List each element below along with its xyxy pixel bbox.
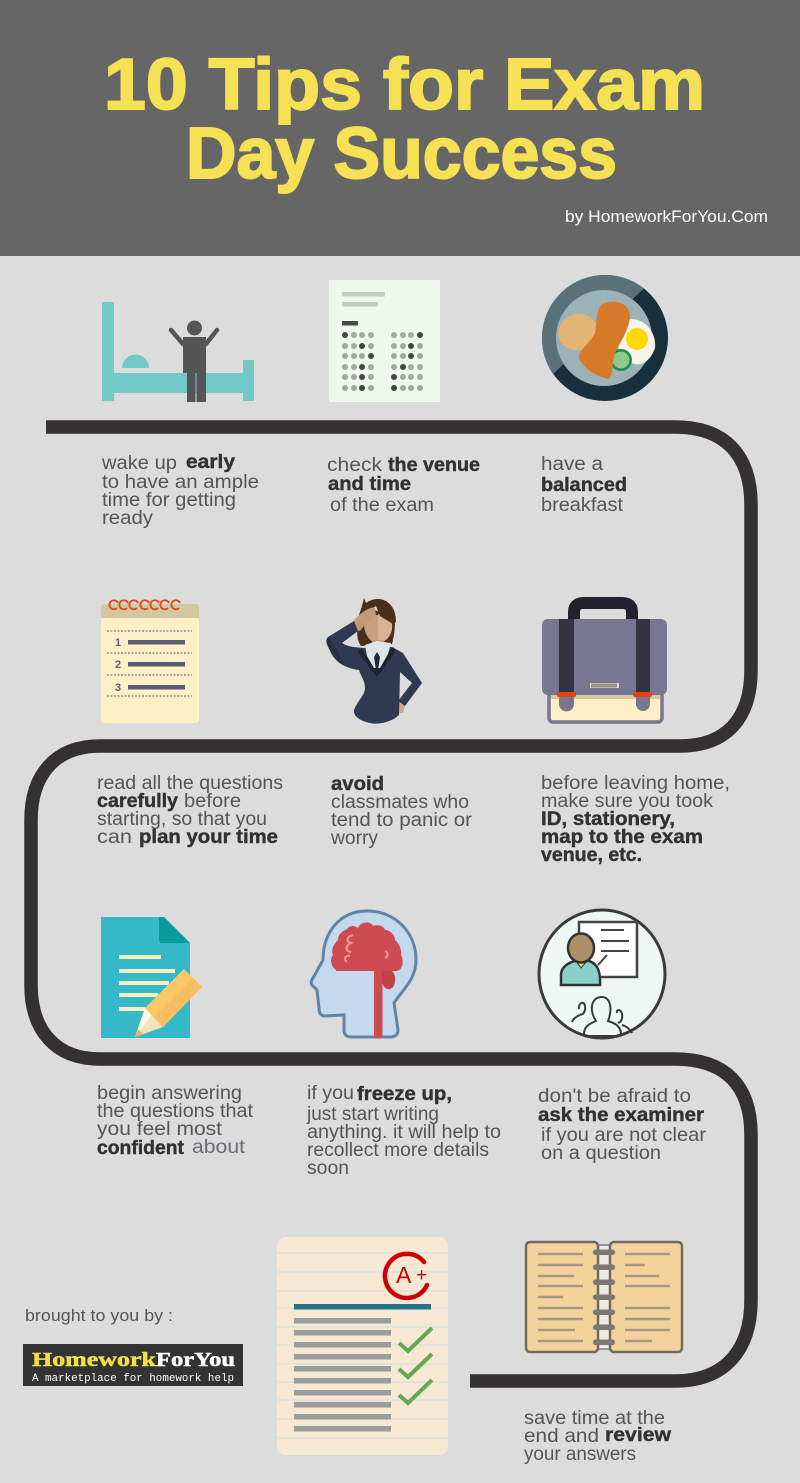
tip 2 text: the venue	[388, 455, 480, 476]
tip 7 text: confident	[97, 1138, 185, 1159]
title: Day Success	[186, 114, 617, 194]
tip 1 text: to have an ample	[102, 472, 259, 493]
tip 3 text: breakfast	[541, 495, 624, 516]
tip 10 text: your answers	[524, 1444, 636, 1465]
tip 9 text: if you are not clear	[541, 1125, 707, 1146]
icon: breakfast plate	[542, 275, 668, 401]
tip 1 text	[101, 452, 259, 529]
tip 10 text: end and	[524, 1426, 599, 1447]
tip 5 text	[330, 774, 473, 849]
tip 1 text: ready	[102, 508, 154, 529]
tip 8 text: if you	[307, 1083, 354, 1104]
tip 5 text: avoid	[331, 774, 384, 795]
tip 6 text	[541, 773, 730, 866]
tip 10 text: review	[605, 1425, 671, 1446]
tip 8 text: soon	[307, 1158, 349, 1179]
brought to you by label: brought to you by :	[25, 1306, 173, 1325]
tip 4 text	[97, 773, 283, 848]
icon: exam answer sheet	[329, 280, 440, 402]
icon: numbered notepad	[101, 600, 199, 723]
logo: HomeworkForYou: Homework	[32, 1349, 157, 1371]
tip 6 text: make sure you took	[541, 791, 714, 812]
tip 8 text: anything. it will help to	[307, 1122, 501, 1143]
tip 2 text	[327, 455, 480, 516]
title: 10 Tips for Exam	[104, 45, 705, 125]
tip 7 text: about	[192, 1137, 246, 1158]
tip 3 text	[541, 454, 627, 516]
tip 4 text: before	[184, 791, 241, 812]
winding timeline path	[31, 427, 751, 1381]
icon: bed and waking person	[102, 302, 254, 402]
tip 6 text: venue, etc.	[541, 845, 642, 866]
tip 2 text: check	[327, 455, 383, 476]
tip 4 text: carefully	[97, 791, 178, 812]
tip 8 text: recollect more details	[307, 1140, 489, 1161]
tip 3 text: have a	[541, 454, 603, 475]
tip 7 text	[97, 1083, 254, 1159]
tip 7 text: you feel most	[97, 1119, 223, 1140]
tip 9 text: on a question	[541, 1143, 661, 1164]
icon: numbered notepad: 3	[115, 682, 121, 694]
tip 1 text: early	[186, 452, 235, 473]
icon: graded exam paper: A	[396, 1262, 412, 1288]
tip 6 text: before leaving home,	[541, 773, 730, 794]
tip 8 text	[306, 1083, 501, 1179]
tip 4 text: read all the questions	[97, 773, 283, 794]
tip 2 text: and time	[328, 474, 411, 495]
logo: HomeworkForYou: A marketplace for homework help	[32, 1373, 234, 1385]
icon: numbered notepad: 2	[115, 659, 121, 671]
tip 4 text: can	[97, 827, 132, 848]
tip 9 text	[538, 1086, 707, 1164]
tip 8 text: freeze up,	[357, 1084, 452, 1105]
logo: HomeworkForYou	[23, 1344, 243, 1386]
tip 10 text	[524, 1408, 671, 1465]
icon: document and pencil	[101, 917, 202, 1038]
tip 1 text: time for getting	[102, 490, 236, 511]
tip 4 text: plan your time	[139, 827, 278, 848]
tip 8 text: just start writing	[306, 1104, 439, 1125]
icon: graded exam paper: +	[416, 1265, 427, 1286]
tip 9 text: ask the examiner	[538, 1105, 705, 1126]
tip 6 text: ID, stationery,	[541, 809, 675, 830]
tip 4 text: starting, so that you	[97, 809, 267, 830]
logo: HomeworkForYou: ForYou	[156, 1349, 235, 1371]
tip 7 text: begin answering	[97, 1083, 242, 1104]
tip 1 text: wake up	[101, 453, 177, 474]
icon: head with brain	[311, 911, 416, 1038]
icon: briefcase	[542, 603, 667, 722]
tip 2 text: of the exam	[330, 495, 434, 516]
tip 6 text: map to the exam	[541, 827, 703, 848]
icon: worried student	[326, 598, 422, 724]
tip 5 text: classmates who	[331, 792, 469, 813]
icon: graded exam paper	[277, 1237, 448, 1455]
title	[104, 45, 705, 194]
icon: numbered notepad: 1	[115, 637, 121, 649]
icon: open spiral notebook	[526, 1242, 682, 1352]
tip 3 text: balanced	[541, 475, 627, 496]
tip 9 text: don't be afraid to	[538, 1086, 691, 1107]
header banner	[0, 0, 800, 256]
tip 7 text: the questions that	[97, 1101, 254, 1122]
tip 5 text: tend to panic or	[331, 810, 473, 831]
icon: examiner and class	[539, 910, 665, 1038]
tip 5 text: worry	[330, 828, 378, 849]
byline: by HomeworkForYou.Com	[565, 207, 768, 226]
tip 10 text: save time at the	[524, 1408, 665, 1429]
